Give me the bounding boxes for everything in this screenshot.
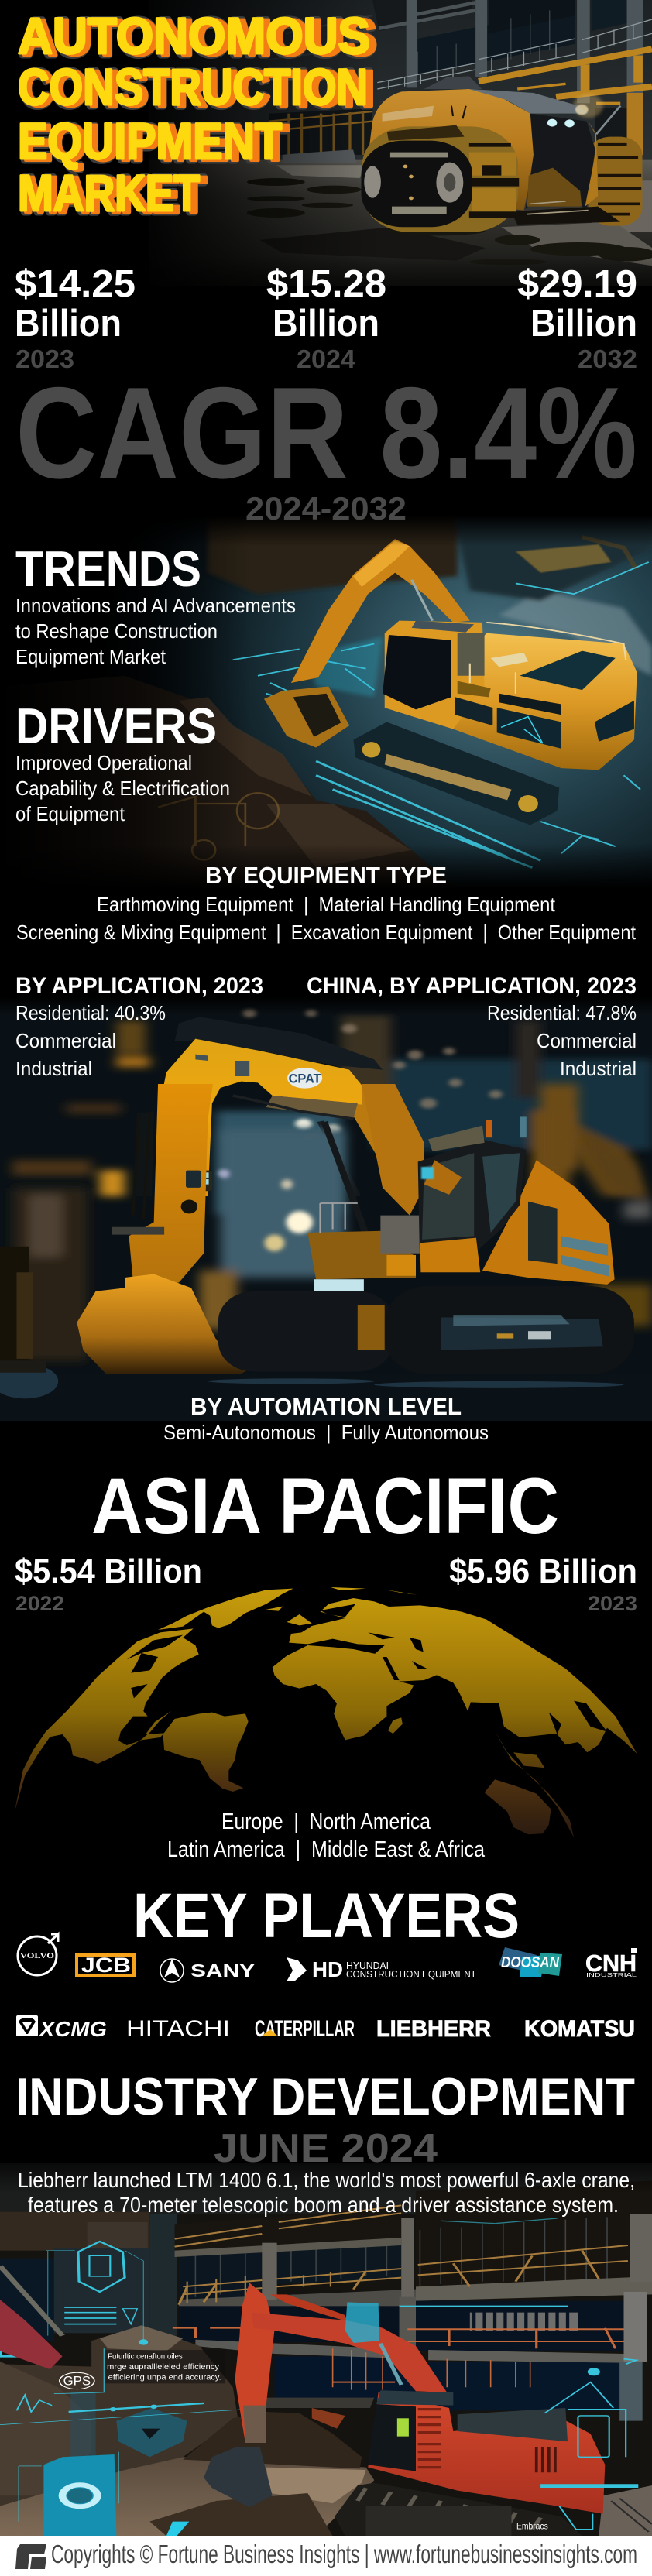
- title: [18, 7, 377, 223]
- heading: Asia Pacific: ASIA PACIFIC: [91, 1462, 559, 1550]
- other regions list: [167, 1809, 486, 1862]
- trends text: Equipment Market: [15, 645, 166, 668]
- upper level interior: [175, 2207, 401, 2251]
- world globe map: [15, 1587, 637, 1837]
- roof dome: [424, 76, 482, 89]
- regional value 2023: $5.96 Billion: [449, 1552, 637, 1590]
- segment: China by application 2023: Industrial: [560, 1057, 637, 1080]
- hero image: tracked autonomous vehicle at construction site: [147, 0, 652, 289]
- left rock: [0, 2325, 238, 2506]
- regional value 2023: 2023: [588, 1592, 637, 1615]
- background excavator: [516, 537, 637, 573]
- logo: Komatsu: KOMATSU: [524, 2016, 635, 2042]
- rails: [175, 2205, 628, 2305]
- track: [335, 2483, 582, 2536]
- trends text: to Reshape Construction: [15, 619, 218, 643]
- main yellow arm: [157, 1039, 362, 1196]
- market stat: 2023: 2023: [15, 345, 74, 373]
- title: MARKET: [18, 164, 200, 221]
- boom lower: [362, 1084, 424, 1216]
- segment: by equipment type: BY EQUIPMENT TYPE: [205, 862, 447, 889]
- segment: by automation level: Semi-Autonomous | Fully Autonomous: [163, 1421, 489, 1444]
- title: MARKET: [22, 166, 207, 223]
- segment: China by application 2023: Residential: 47.8%: [487, 1001, 637, 1024]
- image: red excavator with digital overlays: Embracs: [516, 2521, 548, 2532]
- image: red excavator with digital overlays: Futurltic cenafton oiles: [108, 2352, 183, 2361]
- drivers text: Improved Operational: [15, 751, 192, 774]
- title: EQUIPMENT: [22, 114, 289, 171]
- drivers text: [15, 751, 230, 825]
- market stat: 2024: 2024: [297, 345, 356, 373]
- footer: [0, 2536, 652, 2576]
- regional value 2022: [15, 1552, 202, 1615]
- segment: by application 2023: BY APPLICATION, 2023: [15, 973, 263, 999]
- circuit lines: [233, 562, 649, 868]
- market stat: 2032: 2032: [578, 345, 637, 373]
- right track: [589, 137, 643, 226]
- image: red excavator with digital overlays: mrge auprallleleled efficiency: [107, 2362, 219, 2371]
- floor details: [283, 149, 356, 163]
- regional value 2022: 2022: [15, 1592, 64, 1615]
- bucket: [77, 1274, 249, 1378]
- tracks: [218, 1293, 249, 1370]
- upper background and boom: CPAT: [289, 1071, 321, 1086]
- logo: SANY: SANY: [190, 1960, 255, 1981]
- regional value 2023: [449, 1552, 637, 1615]
- rubble: [247, 178, 652, 265]
- bucket: [204, 2447, 273, 2507]
- segment: China by application 2023: Commercial: [537, 1029, 637, 1052]
- trends text: Innovations and AI Advancements: [15, 594, 296, 617]
- rear boom: [354, 1087, 376, 1154]
- drivers text: of Equipment: [15, 802, 125, 825]
- building windows: [417, 15, 575, 74]
- market stat: 2024: $15.28: [266, 263, 386, 305]
- segment: China by application 2023: CHINA, BY APPLICATION, 2023: [307, 973, 637, 999]
- logo: Doosan: DOOSAN: [501, 1954, 559, 1971]
- icon: Fortune Business Insights logo: [15, 2544, 46, 2569]
- image: excavator on circuit board ground: [0, 513, 652, 896]
- market stat: 2032: [517, 263, 637, 373]
- stick arm: [129, 1084, 213, 1283]
- title: CONSTRUCTION: [22, 60, 375, 117]
- upper left wall: [0, 2212, 149, 2251]
- body: [368, 89, 535, 211]
- hud card: [43, 2454, 116, 2536]
- title: CONSTRUCTION: [21, 60, 373, 117]
- market stat: 2032: Billion: [530, 303, 637, 345]
- logo: Caterpillar: [255, 2016, 355, 2042]
- image: yellow excavator at night: [0, 997, 652, 1422]
- logo: Volvo: [18, 1934, 58, 1975]
- logo: Hyundai Construction Equipment: CONSTRUCTION EQUIPMENT: [346, 1968, 476, 1980]
- top frame: [175, 1017, 383, 1070]
- slabs and columns: [175, 2238, 401, 2257]
- logo: Hyundai Construction Equipment: HD: [312, 1957, 343, 1981]
- inner track frame: [362, 141, 472, 227]
- title: EQUIPMENT: [21, 114, 287, 171]
- market stat: 2024: Billion: [273, 303, 379, 345]
- date: JUNE 2024: [214, 2126, 438, 2171]
- logo: Hitachi: HITACHI: [126, 2016, 230, 2042]
- upper body: [307, 1231, 416, 1279]
- segment: by equipment type: [16, 862, 637, 944]
- segment: by automation level: [163, 1393, 489, 1444]
- segment: by equipment type: Earthmoving Equipment | Material Handling Equipment: [97, 893, 556, 916]
- logo: JCB: [75, 1953, 136, 1977]
- segment: China by application 2023: [307, 973, 637, 1080]
- upper background and boom: [12, 1009, 652, 1214]
- logo: Liebherr: LIEBHERR: [376, 2016, 491, 2042]
- heading: TRENDS: TRENDS: [15, 540, 201, 597]
- trends text: [15, 594, 296, 668]
- image: red excavator with digital overlays: GPS: [63, 2374, 91, 2388]
- front face: [526, 114, 595, 209]
- market stat: 2024: [266, 263, 386, 373]
- logo: SANY: [160, 1959, 255, 1982]
- railings: [377, 19, 652, 89]
- market stat: 2023: Billion: [15, 303, 122, 345]
- title: AUTONOMOUS: [18, 7, 370, 64]
- logo: Hyundai Construction Equipment: [287, 1957, 476, 1981]
- market stat: 2032: $29.19: [517, 263, 637, 305]
- logo: CNH Industrial: INDUSTRIAL: [586, 1971, 637, 1978]
- dirt mound: [88, 676, 438, 878]
- title: AUTONOMOUS: [21, 9, 376, 66]
- CAGR period: 2024-2032: [245, 490, 407, 527]
- excavator: [291, 539, 470, 683]
- regional value 2022: $5.54 Billion: [15, 1552, 202, 1590]
- segment: by application 2023: Residential: 40.3%: [15, 1001, 166, 1024]
- title: AUTONOMOUS: [22, 9, 377, 66]
- logo: CNH Industrial: CNH: [585, 1950, 637, 1977]
- other regions list: Europe | North America: [221, 1809, 431, 1834]
- main track: [362, 126, 518, 232]
- machine body: [368, 2392, 605, 2514]
- boom: [270, 2294, 347, 2321]
- logo: Caterpillar: CATERPILLAR: [255, 2016, 355, 2042]
- image: red excavator with digital overlays: efficiering unpa end accuracy.: [108, 2372, 221, 2382]
- market stat: 2023: [15, 263, 136, 373]
- logo: XCMG: XCMG: [38, 2017, 107, 2041]
- title: CONSTRUCTION: [18, 58, 368, 115]
- mid and lower navy: [416, 2301, 624, 2351]
- segment: by application 2023: [15, 973, 263, 1080]
- icon: vehicle: [362, 76, 643, 232]
- title: EQUIPMENT: [18, 112, 282, 170]
- drivers text: Capability & Electrification: [15, 777, 230, 800]
- development description: [18, 2168, 635, 2217]
- title: MARKET: [21, 166, 205, 223]
- excavator stick: [235, 2283, 274, 2443]
- heading: DRIVERS: DRIVERS: [15, 698, 217, 754]
- market stat: 2023: $14.25: [15, 263, 136, 305]
- image: red excavator with digital overlays: [0, 2160, 652, 2537]
- logo: JCB: JCB: [81, 1953, 131, 1977]
- other regions list: Latin America | Middle East & Africa: [167, 1837, 486, 1862]
- logo: Hyundai Construction Equipment: HYUNDAI: [346, 1960, 389, 1971]
- orange beams: [269, 49, 652, 155]
- logo: XCMG: [16, 2015, 107, 2041]
- logo: Doosan: [499, 1947, 562, 1977]
- heading: key players: KEY PLAYERS: [133, 1881, 520, 1951]
- segment: by application 2023: Commercial: [15, 1029, 116, 1052]
- segment: by automation level: BY AUTOMATION LEVEL: [190, 1393, 462, 1420]
- ground: [0, 2457, 374, 2536]
- hud left: [0, 2242, 245, 2425]
- logo: Volvo: VOLVO: [20, 1952, 54, 1960]
- hud right: [400, 2218, 638, 2530]
- ground: [105, 1374, 242, 1378]
- red machine on left: [0, 2300, 63, 2369]
- segment: by application 2023: Industrial: [15, 1057, 92, 1080]
